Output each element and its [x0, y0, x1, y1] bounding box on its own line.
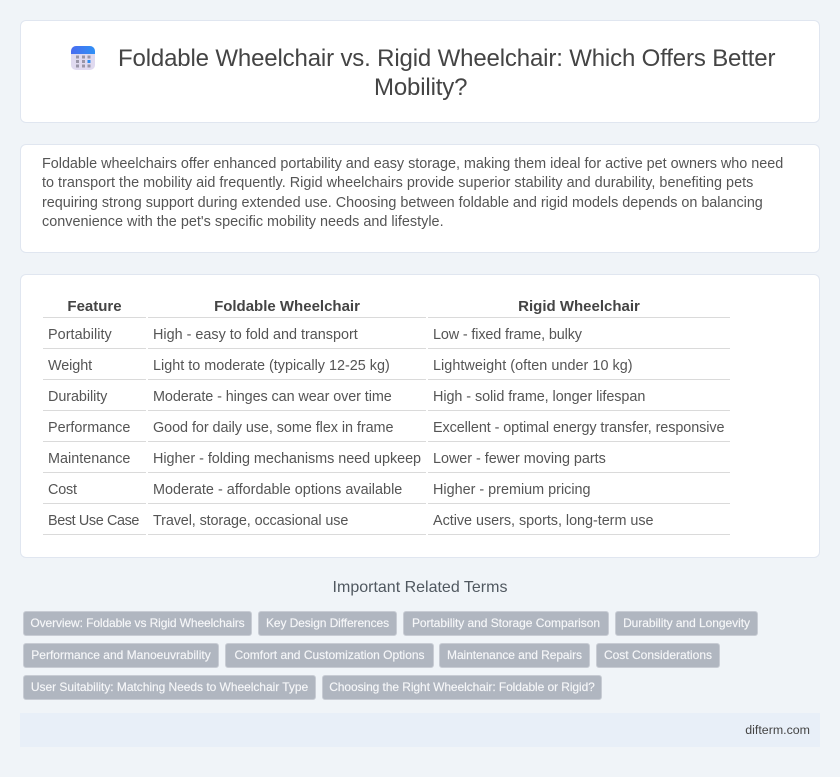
row: Maintenance: Maintenance: [48, 451, 130, 467]
row: Cost: Moderate - affordable options available: [153, 482, 402, 498]
tag: Performance and Manoeuvrability: [31, 648, 211, 662]
row: Weight: Lightweight (often under 10 kg): [433, 358, 633, 374]
intro text: [42, 156, 783, 230]
tag: [23, 611, 252, 636]
row: Durability: Moderate - hinges can wear over time: [153, 389, 392, 405]
row: Best Use Case: Best Use Case: [48, 513, 139, 529]
tag: Overview: Foldable vs Rigid Wheelchairs: [30, 616, 245, 630]
related term tags: [23, 611, 758, 700]
intro text: to transport the mobility aid frequently. Rigid wheelchairs provide superior stability and durability, benefiting pets: [42, 175, 753, 191]
row: Weight: Light to moderate (typically 12-25 kg): [153, 358, 390, 374]
tag: Cost Considerations: [604, 648, 712, 662]
row: Best Use Case: Travel, storage, occasional use: [153, 513, 348, 529]
tag: User Suitability: Matching Needs to Wheelchair Type: [31, 680, 308, 694]
intro text: requiring strong support during extended use. Choosing between foldable and rigid models depends on balancing: [42, 195, 763, 211]
icon: calendar grid: [71, 46, 95, 70]
footer bar: [20, 713, 820, 747]
tag: [23, 643, 219, 668]
comparison table: [43, 298, 730, 535]
intro text: Foldable wheelchairs offer enhanced portability and easy storage, making them ideal for active pet owners who need: [42, 156, 783, 172]
row: Performance: [48, 420, 724, 436]
tag: [403, 611, 609, 636]
tag: Maintenance and Repairs: [447, 648, 582, 662]
panel: header: [20, 20, 820, 123]
row: Best Use Case: [48, 513, 654, 529]
row: Best Use Case: Active users, sports, long-term use: [433, 513, 654, 529]
row: Weight: Weight: [48, 358, 92, 374]
row: Maintenance: [48, 451, 606, 467]
tag: [596, 643, 720, 668]
tag: Key Design Differences: [266, 616, 389, 630]
table header: Feature: [67, 298, 122, 315]
title: [118, 45, 776, 101]
panel: intro: [20, 144, 820, 253]
row: Cost: Higher - premium pricing: [433, 482, 591, 498]
tag: [322, 675, 602, 700]
row: Cost: [48, 482, 591, 498]
row: Performance: Performance: [48, 420, 130, 436]
row: Durability: [48, 389, 645, 405]
table header: Foldable Wheelchair: [214, 298, 360, 315]
title: Foldable Wheelchair vs. Rigid Wheelchair: Which Offers Better: [118, 45, 775, 72]
table header: [67, 298, 640, 315]
tag: Comfort and Customization Options: [234, 648, 425, 662]
row: Performance: Excellent - optimal energy transfer, responsive: [433, 420, 724, 436]
row: Portability: Portability: [48, 327, 112, 343]
row: Weight: [48, 358, 633, 374]
tag: [258, 611, 397, 636]
tag: [439, 643, 590, 668]
row: Maintenance: Lower - fewer moving parts: [433, 451, 606, 467]
tag: Choosing the Right Wheelchair: Foldable or Rigid?: [329, 680, 595, 694]
tag: [23, 675, 316, 700]
row: Durability: High - solid frame, longer lifespan: [433, 389, 645, 405]
row: Durability: Durability: [48, 389, 107, 405]
row: Portability: [48, 327, 582, 343]
panel: comparison table: [20, 274, 820, 558]
footer credit: difterm.com: [745, 723, 810, 737]
tag: Portability and Storage Comparison: [412, 616, 600, 630]
row: Portability: High - easy to fold and transport: [153, 327, 358, 343]
tag: Durability and Longevity: [623, 616, 750, 630]
title: Mobility?: [374, 74, 467, 101]
intro text: convenience with the pet's specific mobility needs and lifestyle.: [42, 214, 444, 230]
table header: Rigid Wheelchair: [518, 298, 640, 315]
row: Portability: Low - fixed frame, bulky: [433, 327, 582, 343]
tag: [615, 611, 758, 636]
tag: [225, 643, 434, 668]
row: Maintenance: Higher - folding mechanisms need upkeep: [153, 451, 421, 467]
row: Cost: Cost: [48, 482, 77, 498]
row: Performance: Good for daily use, some flex in frame: [153, 420, 393, 436]
heading: related terms: Important Related Terms: [333, 579, 507, 596]
